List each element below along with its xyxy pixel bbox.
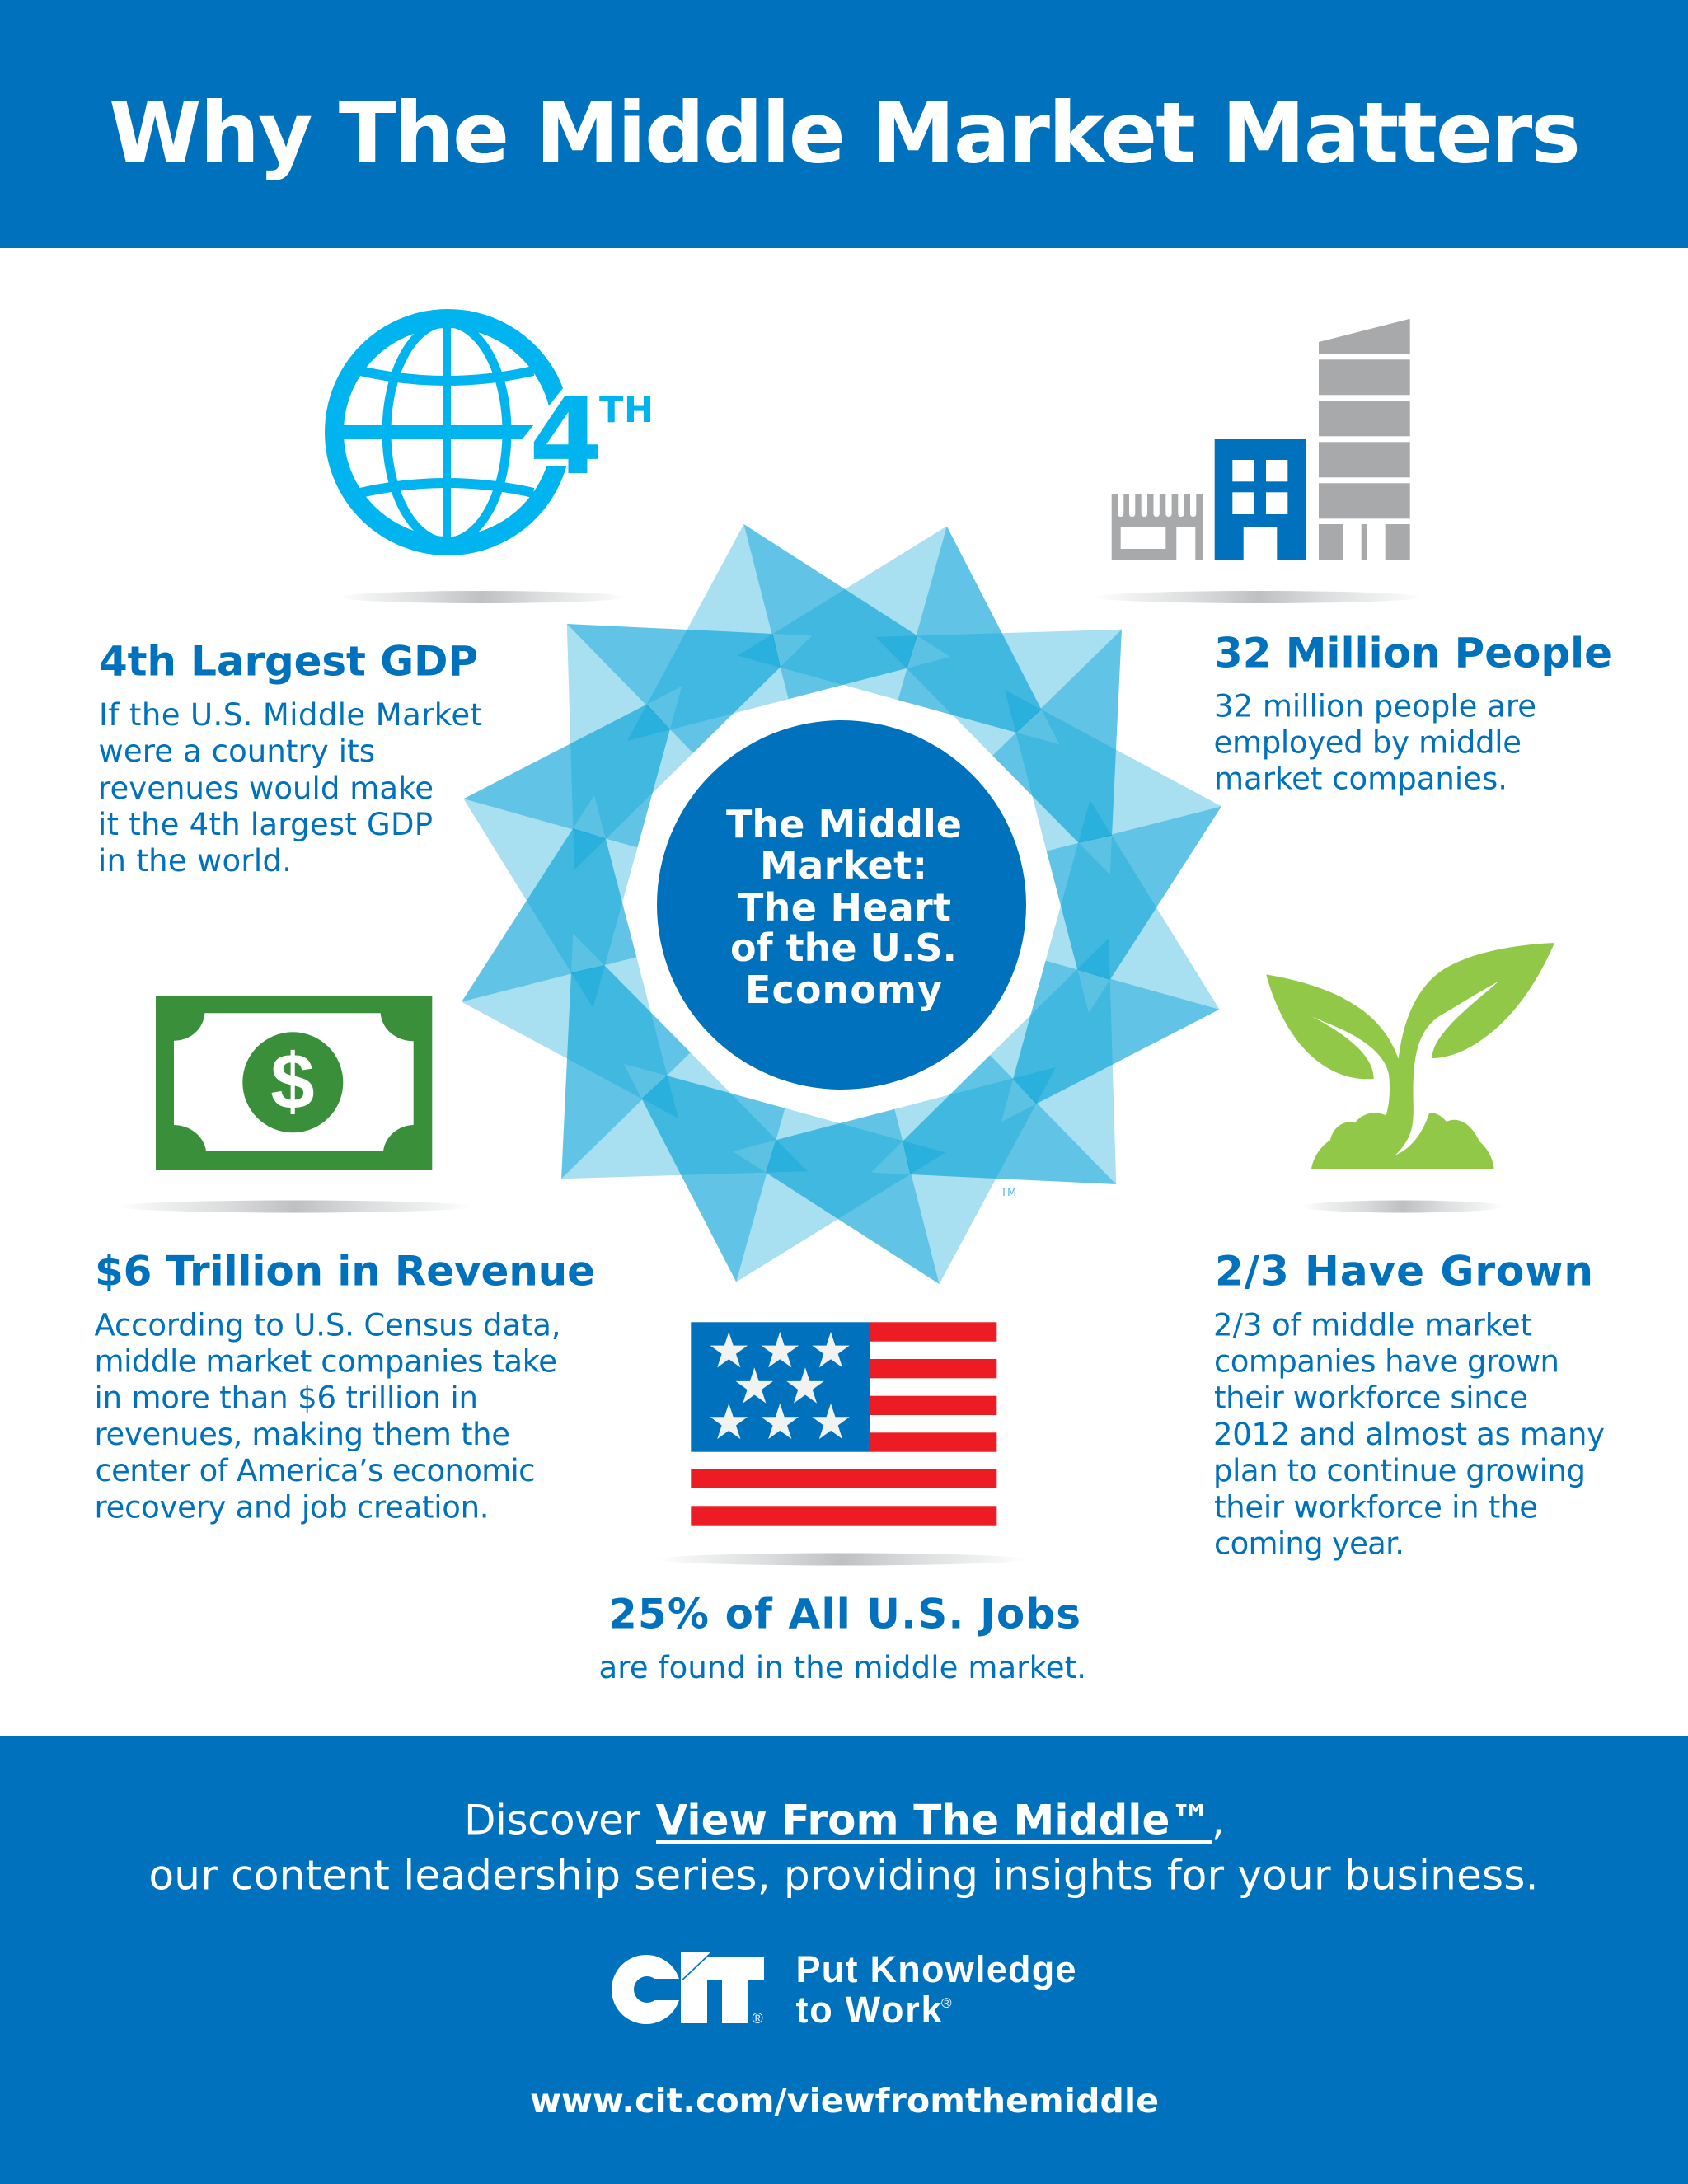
body text xyxy=(98,697,482,879)
icon: american flag xyxy=(691,1322,996,1526)
body text: recovery and job creation. xyxy=(94,1490,490,1525)
heading: 32 Million People xyxy=(1214,630,1612,677)
panel: 32 million people xyxy=(1094,319,1612,796)
center circle text: The Middle xyxy=(726,802,962,846)
body text: in more than $6 trillion in xyxy=(94,1380,478,1416)
body text: 2012 and almost as many xyxy=(1213,1417,1605,1452)
heading: $6 Trillion in Revenue xyxy=(95,1248,595,1296)
logo tagline xyxy=(796,1948,1076,2031)
center circle xyxy=(657,720,1026,1090)
body text: revenues would make xyxy=(98,771,434,806)
center circle text: Economy xyxy=(745,968,942,1012)
shop xyxy=(1112,494,1203,560)
body text: center of America’s economic xyxy=(96,1453,536,1488)
body text: their workforce in the xyxy=(1214,1490,1538,1525)
body text xyxy=(1213,1307,1605,1561)
logo tagline: to Work xyxy=(796,1989,942,2031)
body text: it the 4th largest GDP xyxy=(98,807,433,842)
trademark mark: TM xyxy=(1000,1187,1016,1199)
icon: dollar bill: $ xyxy=(270,1038,315,1126)
call to action text: , xyxy=(1212,1797,1225,1844)
icon: globe with 4th: 4 xyxy=(529,375,603,499)
icon shadow xyxy=(1094,591,1423,603)
body text: companies have grown xyxy=(1214,1343,1559,1380)
body text: plan to continue growing xyxy=(1213,1453,1586,1488)
blue office xyxy=(1215,439,1306,560)
CIT logo xyxy=(612,1952,764,2027)
heading: 2/3 Have Grown xyxy=(1215,1248,1593,1296)
icon shadow xyxy=(1301,1200,1505,1213)
body text: 32 million people are xyxy=(1214,689,1536,724)
icon shadow xyxy=(338,591,626,603)
body text: in the world. xyxy=(98,843,292,879)
logo tagline: ® xyxy=(941,1995,952,2011)
icon: buildings xyxy=(1112,319,1410,560)
footer panel xyxy=(0,1736,1688,2184)
call to action text xyxy=(148,1797,1538,1899)
icon: dollar bill xyxy=(156,996,432,1170)
center circle text: of the U.S. xyxy=(730,926,957,970)
body text: employed by middle xyxy=(1213,725,1522,760)
panel: 25 percent of jobs xyxy=(598,1322,1086,1685)
icon: globe with 4th xyxy=(335,318,654,546)
body text: If the U.S. Middle Market xyxy=(99,697,482,733)
body text: 2/3 of middle market xyxy=(1213,1307,1532,1343)
body text: middle market companies take xyxy=(94,1343,557,1380)
panel: two thirds have grown xyxy=(1213,943,1605,1561)
body text xyxy=(94,1307,560,1525)
header banner xyxy=(0,0,1688,248)
logo tagline: Put Knowledge xyxy=(796,1948,1076,1990)
star of overlapping blue triangles xyxy=(406,468,1278,1340)
call to action text: View From The Middle™ xyxy=(656,1797,1212,1844)
center circle text: The Heart xyxy=(738,885,951,930)
body text: According to U.S. Census data, xyxy=(94,1307,560,1343)
central star emblem xyxy=(406,468,1278,1340)
body text: market companies. xyxy=(1214,762,1507,796)
center circle text: Market: xyxy=(760,843,927,888)
icon: seedling xyxy=(1266,943,1554,1169)
website url: www.cit.com/viewfromthemiddle xyxy=(530,2081,1159,2121)
heading: 25% of All U.S. Jobs xyxy=(608,1591,1081,1638)
call to action text: our content leadership series, providing insights for your business. xyxy=(148,1851,1538,1899)
tower xyxy=(1319,319,1410,560)
body text: are found in the middle market. xyxy=(598,1650,1086,1685)
body text xyxy=(1213,689,1536,796)
panel: 4th largest GDP xyxy=(98,318,654,879)
CIT logo: ® xyxy=(752,2010,763,2027)
title: Why The Middle Market Matters xyxy=(109,84,1581,183)
body text: their workforce since xyxy=(1214,1380,1528,1416)
panel: 6 trillion in revenue xyxy=(94,996,595,1525)
body text: revenues, making them the xyxy=(94,1417,510,1452)
heading: 4th Largest GDP xyxy=(99,638,478,686)
body text: coming year. xyxy=(1214,1526,1404,1561)
icon shadow xyxy=(117,1200,473,1213)
center circle text xyxy=(726,802,962,1012)
icon shadow xyxy=(656,1553,1027,1566)
body text: were a country its xyxy=(99,733,375,769)
icon: globe with 4th: TH xyxy=(599,390,654,431)
call to action text: Discover xyxy=(464,1797,640,1844)
